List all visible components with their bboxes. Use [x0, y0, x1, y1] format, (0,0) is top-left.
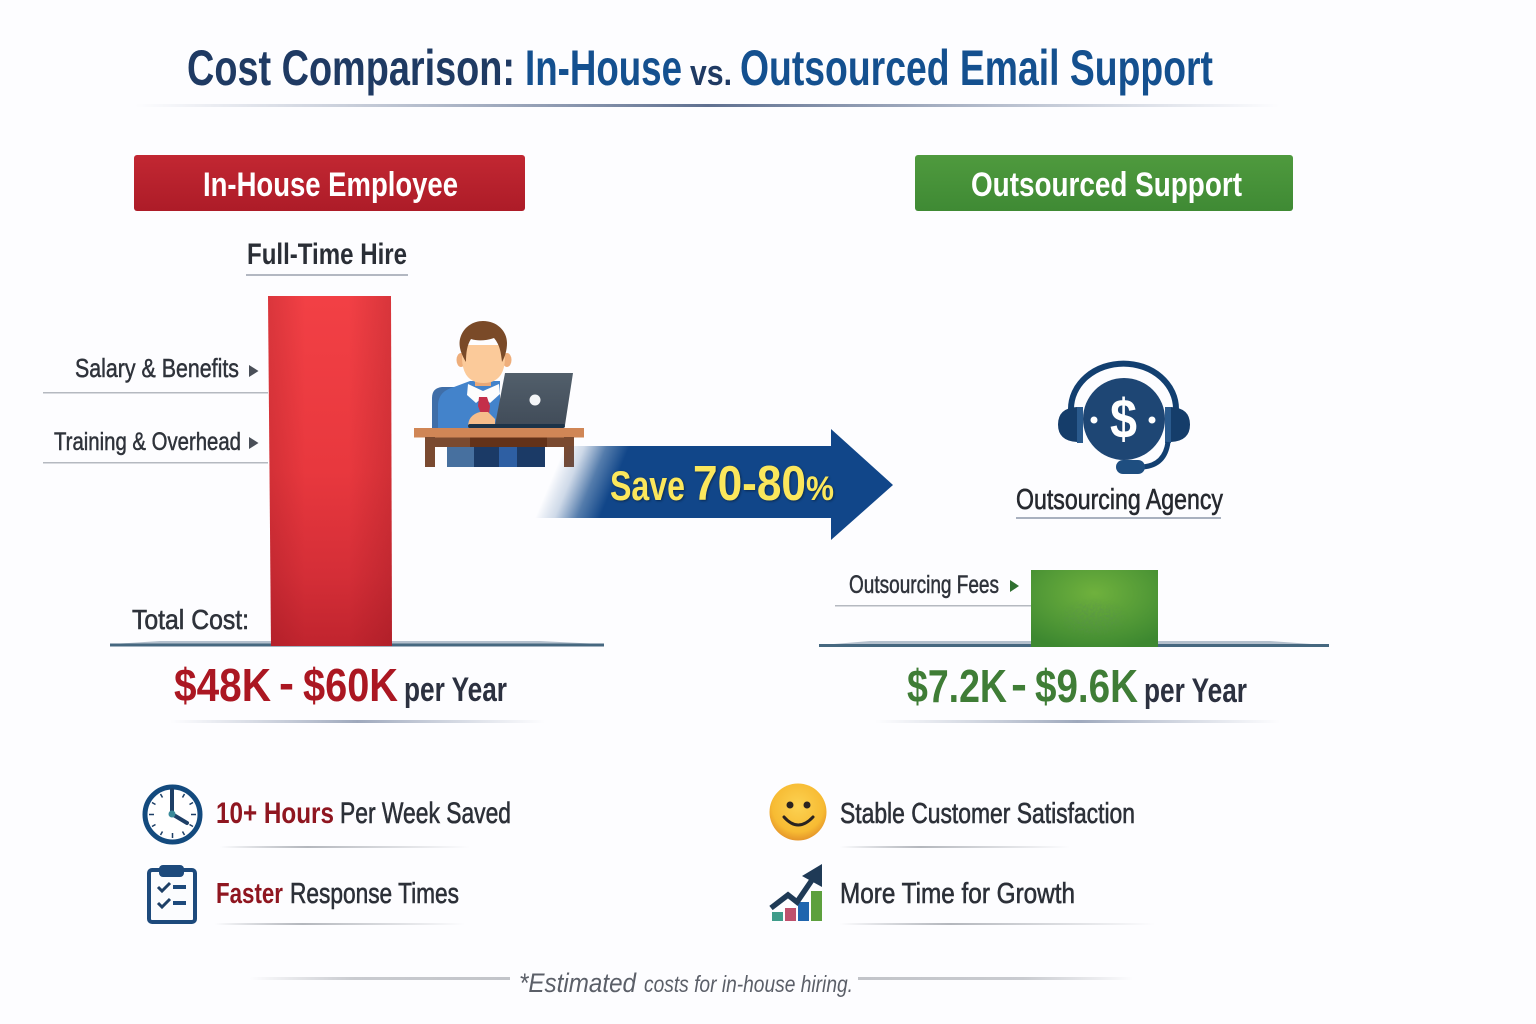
- value: outsourced cost: $7.2K: [907, 660, 1007, 712]
- title: Cost Comparison:: [187, 40, 515, 96]
- benefit: hours saved: [145, 787, 511, 848]
- text: faster response: Response Times: [290, 878, 459, 910]
- label: salary and benefits: [43, 353, 268, 394]
- title: vs.: [690, 52, 732, 93]
- label: outsourcing agency: Outsourcing Agency: [1016, 484, 1223, 516]
- heading: outsourced support: Outsourced Support: [971, 166, 1242, 204]
- footnote: *Estimated: [519, 968, 637, 998]
- value: outsourced cost: per Year: [1144, 672, 1247, 710]
- label: training and overhead: Training & Overhead: [54, 428, 241, 456]
- value: in-house cost: $60K: [303, 659, 398, 711]
- value: in-house cost: [170, 657, 545, 723]
- label: outsourcing fees: [835, 571, 1031, 606]
- value: in-house cost: -: [279, 657, 294, 709]
- value: in-house cost: $48K: [174, 659, 271, 711]
- baseline: [110, 641, 604, 646]
- bar: outsourced cost: [1031, 570, 1158, 647]
- icon: smiley: [770, 784, 826, 840]
- icon: growth chart: [771, 864, 822, 921]
- value: in-house cost: per Year: [404, 671, 507, 709]
- text: hours saved: Per Week Saved: [340, 797, 511, 830]
- heading: in-house employee: In-House Employee: [203, 166, 458, 204]
- heading: in-house employee: [134, 155, 525, 211]
- text: hours saved: 10+ Hours: [216, 797, 334, 830]
- title: [135, 40, 1280, 107]
- title: In-House: [525, 40, 682, 96]
- panel: in-house employee: [43, 155, 604, 723]
- benefit: customer satisfaction: [770, 784, 1135, 848]
- label: salary and benefits: Salary & Benefits: [75, 353, 239, 383]
- title: Outsourced Email Support: [740, 40, 1213, 96]
- icon: clock: [145, 787, 200, 842]
- text: time for growth: More Time for Growth: [840, 878, 1075, 910]
- arrow: save 70-80%: [535, 429, 893, 540]
- heading: outsourced support: [915, 155, 1293, 211]
- value: outsourced cost: $9.6K: [1035, 660, 1138, 712]
- benefit: faster response: [149, 865, 465, 925]
- label: total cost: Total Cost:: [132, 604, 249, 635]
- panel: outsourced support: [819, 155, 1329, 723]
- bar: in-house cost: [268, 296, 392, 646]
- icon: employee at desk: [414, 321, 584, 467]
- footnote: costs for in-house hiring.: [644, 971, 853, 997]
- text: faster response: Faster: [216, 878, 283, 910]
- icon: headset with dollar: [1058, 364, 1190, 474]
- baseline: [819, 641, 1329, 647]
- value: outsourced cost: -: [1011, 658, 1027, 710]
- value: outsourced cost: [875, 658, 1280, 723]
- label: outsourcing fees: Outsourcing Fees: [849, 571, 999, 599]
- subheading: full-time hire: Full-Time Hire: [247, 238, 407, 271]
- text: customer satisfaction: Stable Customer Satisfaction: [840, 798, 1135, 830]
- text: faster response: [215, 878, 465, 925]
- icon: clipboard: [149, 865, 195, 922]
- icon: headset with dollar: $: [1110, 387, 1137, 450]
- arrow: save 70-80%: 70-80: [693, 457, 806, 511]
- arrow: save 70-80%: %: [806, 470, 834, 508]
- arrow: save 70-80%: Save: [610, 462, 685, 509]
- text: hours saved: [216, 797, 511, 848]
- footnote: [250, 968, 1133, 998]
- benefit: time for growth: [771, 864, 1155, 925]
